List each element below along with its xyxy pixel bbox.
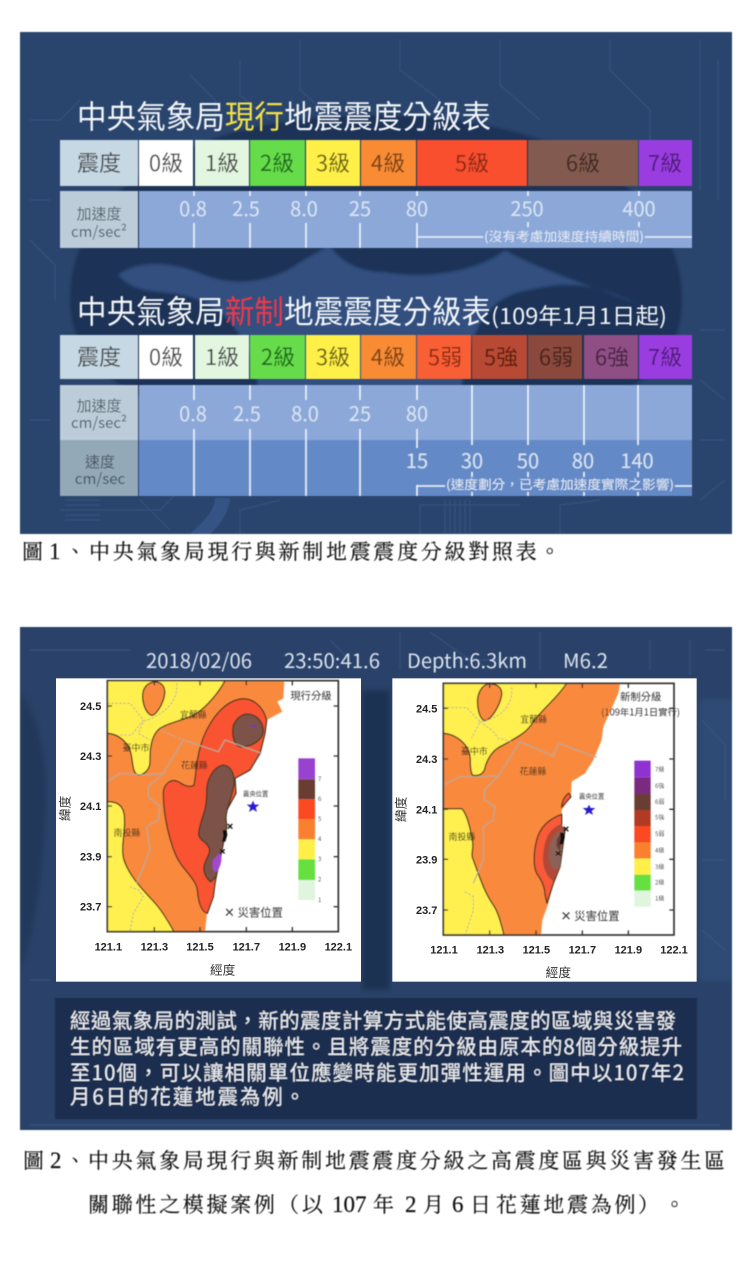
- contour map: current scale: × 災害位置: [224, 904, 283, 920]
- axis labels: 121.3: [477, 944, 504, 956]
- table: new acceleration and velocity rows: cm/sec: [75, 468, 126, 489]
- caption: figure 2: 中央氣象局現行與新制地震震度分級之高震度區與災害發生區: [88, 1149, 728, 1173]
- table: new acceleration and velocity rows: 8.0: [291, 398, 319, 427]
- caption: figure 2: 年: [373, 1193, 397, 1217]
- axis labels: 23.7: [80, 902, 101, 914]
- caption: figure 2: [23, 1148, 728, 1217]
- axis labels: 122.1: [325, 942, 352, 954]
- axis labels: 121.3: [141, 942, 168, 954]
- place names: 臺中市: [461, 744, 488, 757]
- table: new intensity scale: 震度: [77, 340, 121, 372]
- table: new intensity scale: 5強: [484, 340, 518, 372]
- table: new intensity scale: 3級: [316, 340, 350, 372]
- table: current intensity scale: 6級: [566, 146, 600, 178]
- table: new acceleration and velocity rows: 80: [406, 398, 428, 427]
- table: current acceleration row: 0.8: [179, 193, 207, 222]
- axis labels: 121.5: [523, 944, 550, 956]
- caption: figure 1: 1: [49, 539, 63, 564]
- table: current acceleration row: 400: [622, 193, 656, 222]
- damage markers: [220, 824, 232, 853]
- legend: new scale: 4級: [655, 845, 664, 854]
- place names: 南投縣: [114, 826, 140, 839]
- epicenter marker: 震央位置: [579, 792, 604, 801]
- caption: figure 2: 2: [405, 1192, 419, 1217]
- axis labels: 121.1: [430, 944, 458, 956]
- caption: figure 2: 2: [50, 1148, 64, 1173]
- event header: [146, 645, 608, 674]
- axis labels: 24.5: [416, 703, 437, 715]
- map card: current scale: [54, 678, 361, 982]
- table: new acceleration and velocity rows: 15: [406, 445, 428, 474]
- legend: new scale: 7級: [655, 765, 664, 774]
- text box: explanation: 生的區域有更高的關聯性。且將震度的分級由原本的8個分級提升: [70, 1030, 682, 1060]
- axis labels: [54, 701, 352, 979]
- axis labels: [390, 703, 688, 981]
- table: new intensity scale: 0級: [149, 340, 183, 372]
- legend: new scale: 6弱: [655, 797, 664, 806]
- caption: figure 2: 。: [664, 1193, 688, 1217]
- legend: current scale: 3: [318, 854, 321, 863]
- table: current acceleration row: cm/sec²: [71, 221, 127, 242]
- table: new acceleration and velocity rows: 2.5: [233, 398, 261, 427]
- place names: 花蓮縣: [181, 758, 208, 771]
- table: new acceleration and velocity rows: 速度: [85, 451, 115, 472]
- axis labels: 經度: [210, 960, 236, 979]
- caption: figure 2: 107: [332, 1192, 366, 1217]
- epicenter marker: [243, 789, 268, 812]
- caption: figure 2: 、: [65, 1149, 89, 1173]
- caption: figure 2: 以: [302, 1193, 326, 1217]
- legend: new scale: [634, 761, 664, 907]
- axis labels: 121.1: [95, 942, 122, 954]
- table: current intensity scale: 震度: [77, 146, 121, 178]
- place names: 宜蘭縣: [180, 708, 207, 721]
- caption: figure 2: 關聯性之模擬案例: [88, 1193, 278, 1217]
- event header: Depth:6.3km: [407, 645, 527, 674]
- table: current intensity scale: 3級: [316, 146, 350, 178]
- event header: 23:50:41.6: [284, 645, 380, 674]
- legend: current scale: [298, 758, 322, 904]
- contour map: new scale: (109年1月1日實行): [601, 705, 680, 719]
- table: new intensity scale: 7級: [648, 340, 682, 372]
- axis labels: 24.1: [416, 804, 437, 816]
- caption: figure 1: 中央氣象局現行與新制地震震度分級對照表。: [89, 540, 563, 564]
- caption: figure 2: ）: [638, 1193, 662, 1217]
- axis labels: 緯度: [390, 796, 409, 822]
- table: new acceleration and velocity rows: 加速度: [76, 395, 122, 416]
- table: new intensity scale: 6強: [595, 340, 629, 372]
- title: new scale: 中央氣象局新制地震震度分級表: [77, 287, 491, 333]
- caption: figure 2: （: [278, 1193, 302, 1217]
- legend: current scale: 1: [318, 895, 321, 904]
- table: new acceleration and velocity rows: 50: [517, 445, 539, 474]
- axis labels: 121.7: [569, 944, 596, 956]
- panel: intensity scale comparison: [20, 32, 732, 534]
- epicenter marker: [579, 792, 604, 815]
- table: new intensity scale: 5弱: [428, 340, 462, 372]
- table: current acceleration row: 2.5: [232, 193, 260, 222]
- axis labels: 121.9: [615, 944, 642, 956]
- axis labels: 23.9: [416, 854, 437, 866]
- table: current intensity scale: 7級: [648, 146, 682, 178]
- table: current intensity scale: 0級: [149, 146, 183, 178]
- caption: figure 2: 花蓮地震為例: [496, 1193, 638, 1217]
- caption: figure 1: 、: [65, 540, 89, 564]
- table: current acceleration row: (沒有考慮加速度持續時間): [484, 226, 644, 245]
- contour map: new scale: 新制分級: [620, 688, 661, 703]
- table: current acceleration row: 8.0: [290, 193, 318, 222]
- table: current acceleration row: 加速度: [76, 203, 122, 224]
- table: new acceleration and velocity rows: 25: [349, 398, 371, 427]
- event header: M6.2: [563, 645, 608, 674]
- caption: figure 2: 日: [470, 1193, 494, 1217]
- caption: figure 1: 圖: [22, 540, 46, 564]
- text box: explanation: 經過氣象局的測試，新的震度計算方式能使高震度的區域與災害發: [70, 1004, 676, 1034]
- axis labels: 121.5: [186, 942, 214, 954]
- caption: figure 2: 6: [452, 1192, 466, 1217]
- epicenter marker: 震央位置: [243, 789, 268, 798]
- title: current scale: 中央氣象局現行地震震度分級表: [77, 92, 491, 138]
- table: new acceleration and velocity rows: 30: [461, 445, 483, 474]
- axis labels: 24.3: [80, 751, 101, 763]
- table: new intensity scale: 1級: [205, 340, 239, 372]
- axis labels: 24.5: [80, 701, 101, 713]
- table: new intensity scale: [60, 335, 692, 379]
- table: new intensity scale: 2級: [261, 340, 295, 372]
- table: new acceleration and velocity rows: 80: [572, 445, 594, 474]
- caption: figure 2: 圖: [23, 1149, 47, 1173]
- table: new acceleration and velocity rows: cm/sec²: [71, 412, 127, 433]
- legend: new scale: 5弱: [655, 829, 664, 838]
- axis labels: 121.9: [279, 942, 306, 954]
- place names: [114, 708, 208, 839]
- legend: new scale: 5強: [655, 813, 664, 822]
- map card: new scale: [390, 678, 697, 982]
- place names: 花蓮縣: [520, 764, 546, 777]
- table: new acceleration and velocity rows: [60, 385, 692, 496]
- contour map: current scale: 現行分級: [290, 687, 332, 702]
- contour map: new scale: × 災害位置: [560, 908, 620, 924]
- legend: current scale: 6: [318, 794, 322, 803]
- axis labels: 經度: [546, 962, 571, 981]
- table: current intensity scale: 1級: [205, 146, 239, 178]
- table: current acceleration row: [60, 191, 692, 248]
- legend: new scale: 6強: [655, 781, 664, 790]
- place names: 臺中市: [123, 741, 149, 754]
- text box: explanation: 月6日的花蓮地震為例。: [70, 1080, 305, 1110]
- axis labels: 24.3: [416, 754, 437, 766]
- table: new acceleration and velocity rows: (速度劃分，已考慮加速度實際之影響): [446, 474, 674, 493]
- legend: current scale: 2: [318, 874, 322, 883]
- table: current acceleration row: 25: [349, 193, 371, 222]
- text box: explanation: [55, 998, 697, 1119]
- place names: [449, 712, 547, 843]
- contour map: current scale: [107, 681, 338, 932]
- axis labels: 23.9: [80, 852, 101, 864]
- legend: current scale: 7: [318, 774, 322, 783]
- damage markers: [556, 827, 568, 855]
- text box: explanation: 至10個，可以讓相關單位應變時能更加彈性運用。圖中以107年2: [70, 1056, 684, 1086]
- title: new scale: (109年1月1日起): [491, 299, 667, 331]
- table: current intensity scale: [60, 140, 692, 186]
- axis labels: 23.7: [416, 905, 437, 917]
- table: current acceleration row: 250: [510, 193, 544, 222]
- place names: 宜蘭縣: [520, 712, 547, 725]
- contour map: new scale: [443, 683, 680, 935]
- table: new intensity scale: 6弱: [539, 340, 573, 372]
- axis labels: 121.7: [233, 942, 260, 954]
- table: new acceleration and velocity rows: 0.8: [179, 398, 207, 427]
- axis labels: 122.1: [660, 944, 688, 956]
- legend: new scale: 1級: [655, 894, 664, 903]
- legend: new scale: 3級: [655, 862, 664, 871]
- table: current intensity scale: 2級: [260, 146, 294, 178]
- table: new acceleration and velocity rows: 140: [620, 445, 654, 474]
- caption: figure 2: 月: [423, 1193, 447, 1217]
- event header: 2018/02/06: [146, 645, 252, 674]
- axis labels: 24.1: [80, 801, 101, 813]
- legend: current scale: 4: [318, 834, 322, 843]
- table: current acceleration row: 80: [406, 193, 428, 222]
- table: current intensity scale: 4級: [371, 146, 405, 178]
- place names: 南投縣: [449, 830, 475, 843]
- legend: current scale: 5: [318, 814, 321, 823]
- panel: simulation case: [20, 627, 732, 1130]
- table: new intensity scale: 4級: [371, 340, 405, 372]
- table: current intensity scale: 5級: [455, 146, 489, 178]
- axis labels: 緯度: [54, 795, 73, 821]
- legend: new scale: 2級: [655, 878, 664, 887]
